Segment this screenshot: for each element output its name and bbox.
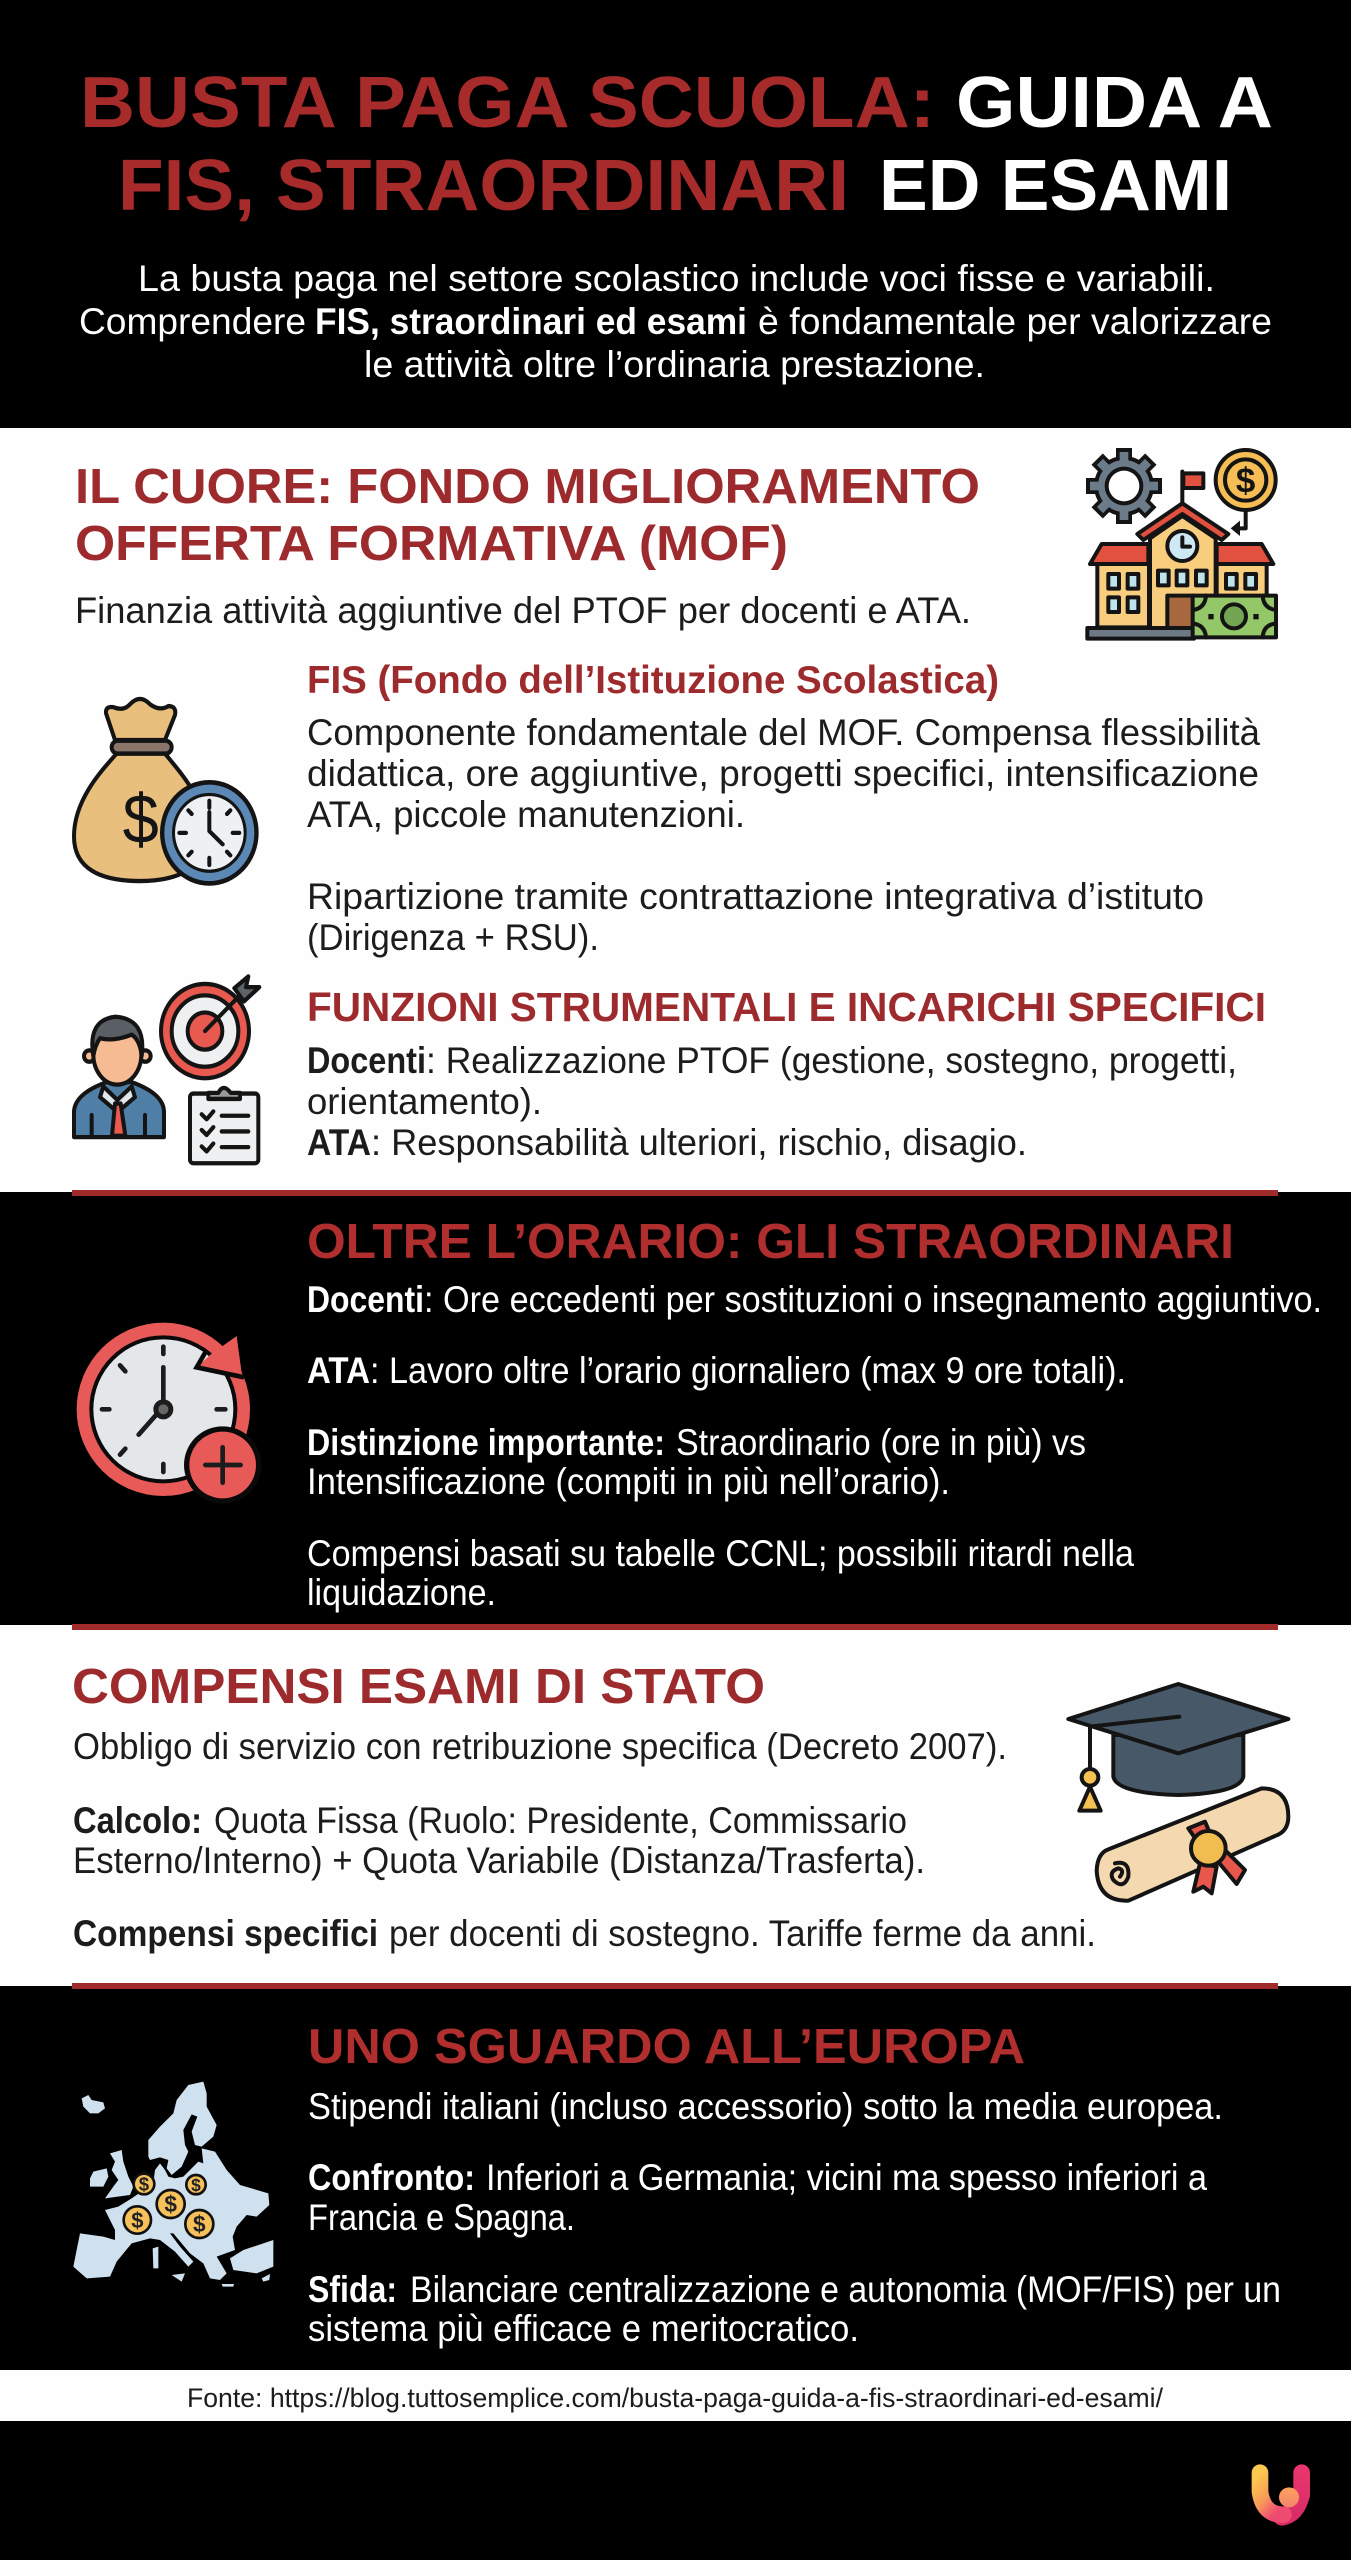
text: europa description: Sfida: — [308, 2269, 397, 2310]
icon: europe map with coins: $ — [139, 2174, 150, 2195]
intro text: le attività oltre l’ordinaria prestazione. — [364, 344, 985, 385]
title: BUSTA PAGA SCUOLA: — [80, 63, 935, 143]
text: europa description: Bilanciare centralizzazione e autonomia (MOF/FIS) per un — [410, 2269, 1281, 2310]
text: FIS description: Ripartizione tramite contrattazione integrativa d’istituto — [307, 876, 1204, 917]
heading: FIS: FIS (Fondo dell’Istituzione Scolastica) — [307, 659, 999, 702]
text: straordinari description: Docenti — [307, 1279, 424, 1320]
text: straordinari description: ATA — [307, 1350, 370, 1391]
heading: il cuore: OFFERTA FORMATIVA (MOF) — [75, 517, 788, 571]
text: finanzia: Finanzia attività aggiuntive del PTOF per docenti e ATA. — [75, 590, 971, 631]
panel: compensi esami di stato — [0, 1624, 1351, 1986]
heading: funzioni strumentali: FUNZIONI STRUMENTALI E INCARICHI SPECIFICI — [307, 984, 1266, 1030]
heading: straordinari: OLTRE L’ORARIO: GLI STRAORDINARI — [307, 1215, 1234, 1269]
text: straordinari description: Compensi basati su tabelle CCNL; possibili ritardi nella — [307, 1533, 1134, 1574]
panel: fondo miglioramento offerta formativa — [0, 428, 1351, 1192]
icon: clock with plus — [77, 1323, 261, 1504]
icon: europe map with coins: $ — [193, 2211, 206, 2237]
icon: school with gear and money — [1086, 448, 1276, 639]
text: esami description: Esterno/Interno) + Quota Variabile (Distanza/Trasferta). — [73, 1840, 925, 1881]
text: straordinari description: Straordinario (ore in più) vs — [676, 1422, 1086, 1463]
icon: europe map with coins — [73, 2082, 273, 2287]
icon: europe map with coins: $ — [191, 2175, 201, 2195]
text: esami description — [73, 1726, 1096, 1954]
title: GUIDA A — [956, 63, 1273, 143]
text: FIS description — [307, 712, 1260, 958]
text block: funzioni strumentali — [307, 984, 1266, 1163]
icon: logo — [1260, 2473, 1302, 2517]
text: straordinari description — [307, 1279, 1322, 1613]
icon: money bag and clock: $ — [123, 781, 159, 858]
text: FIS description: Componente fondamentale del MOF. Compensa flessibilità — [307, 712, 1260, 753]
text: straordinari description: Intensificazione (compiti in più nell’orario). — [307, 1461, 950, 1502]
icon: money bag and clock — [74, 699, 259, 886]
text: source: Fonte: https://blog.tuttosemplice.com/busta-paga-guida-a-fis-straordinari-ed-esami/ — [187, 2383, 1163, 2413]
icon: europe map with coins: $ — [164, 2191, 177, 2217]
text: straordinari description: Distinzione importante: — [307, 1422, 665, 1463]
icon: graduation cap and diploma — [1068, 1684, 1288, 1901]
title: ED ESAMI — [879, 146, 1232, 226]
text: FIS description: ATA, piccole manutenzioni. — [307, 794, 745, 835]
intro text — [79, 258, 1272, 385]
heading: il cuore: IL CUORE: FONDO MIGLIORAMENTO — [75, 460, 980, 514]
icon: person, target and checklist — [74, 976, 259, 1163]
text: europa description: Stipendi italiani (incluso accessorio) sotto la media europea. — [308, 2086, 1223, 2127]
text: europa description — [308, 2086, 1281, 2349]
text: europa description: Francia e Spagna. — [308, 2197, 575, 2238]
text: europa description: Confronto: — [308, 2157, 475, 2198]
text: funzioni description: : Responsabilità ulteriori, rischio, disagio. — [371, 1122, 1027, 1163]
intro text: Comprendere — [79, 301, 306, 342]
heading: europa: UNO SGUARDO ALL’EUROPA — [308, 2020, 1025, 2074]
heading: compensi esami: COMPENSI ESAMI DI STATO — [72, 1660, 765, 1714]
text: FIS description: (Dirigenza + RSU). — [307, 917, 599, 958]
icon: europe map with coins: $ — [131, 2208, 143, 2233]
intro text: è fondamentale per valorizzare — [758, 301, 1272, 342]
panel: source — [0, 2370, 1351, 2421]
panel: europa — [0, 1983, 1351, 2370]
text: straordinari description: liquidazione. — [307, 1572, 496, 1613]
panel: header — [0, 0, 1351, 428]
panel: footer — [0, 2421, 1351, 2560]
text: funzioni description: orientamento). — [307, 1081, 542, 1122]
title: FIS, STRAORDINARI — [118, 146, 849, 226]
text: esami description: Compensi specifici — [73, 1913, 378, 1954]
text: europa description: sistema più efficace e meritocratico. — [308, 2308, 859, 2349]
text: funzioni description: ATA — [307, 1122, 371, 1163]
text: esami description: Calcolo: — [73, 1800, 202, 1841]
icon: school with gear and money: $ — [1236, 462, 1255, 501]
intro text: La busta paga nel settore scolastico include voci fisse e variabili. — [138, 258, 1215, 299]
text block: FIS — [307, 659, 1260, 958]
text: straordinari description: : Lavoro oltre l’orario giornaliero (max 9 ore totali). — [370, 1350, 1126, 1391]
intro text: FIS, straordinari ed esami — [315, 301, 747, 342]
text: funzioni description: Docenti — [307, 1040, 426, 1081]
text: FIS description: didattica, ore aggiuntive, progetti specifici, intensificazione — [307, 753, 1259, 794]
text: esami description: per docenti di sostegno. Tariffe ferme da anni. — [389, 1913, 1096, 1954]
panel: straordinari — [0, 1190, 1351, 1625]
title — [80, 63, 1273, 226]
text: europa description: Inferiori a Germania; vicini ma spesso inferiori a — [486, 2157, 1207, 2198]
text: esami description: Obbligo di servizio con retribuzione specifica (Decreto 2007). — [73, 1726, 1007, 1767]
text: esami description: Quota Fissa (Ruolo: Presidente, Commissario — [214, 1800, 907, 1841]
text: funzioni description: : Realizzazione PTOF (gestione, sostegno, progetti, — [426, 1040, 1237, 1081]
text: funzioni description — [307, 1040, 1237, 1163]
heading: il cuore — [75, 460, 980, 571]
